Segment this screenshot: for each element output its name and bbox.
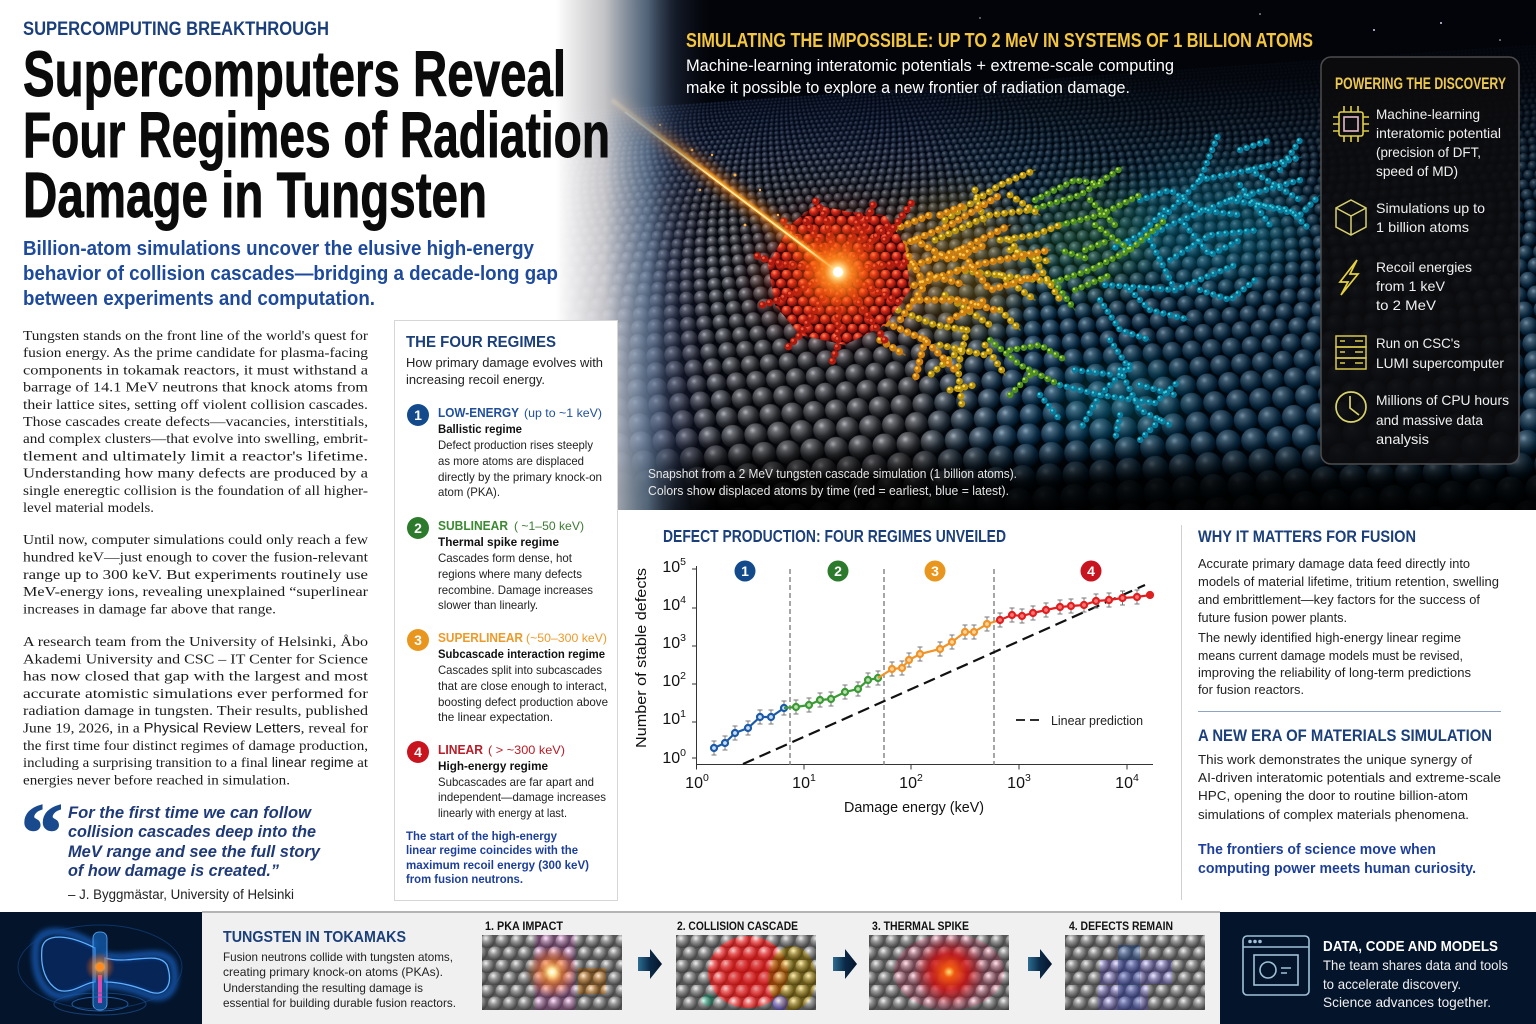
panel: the four regimes [394,320,618,900]
text: new era: simulations of complex materials phenomena. [1198,807,1469,822]
photo: atomic lattice with collision cascade [575,0,1536,510]
y axis label: Number of stable defects [634,568,650,748]
heading: new era: A NEW ERA OF MATERIALS SIMULATION [1198,726,1492,745]
regime 4: High-energy regime [438,759,548,773]
article paragraph 1: components in tokamak reactors, it must withstand a [23,363,369,378]
article paragraph 1: their lattice sites, setting off violent collision cascades. [23,398,368,413]
cascade: red earliest atoms [754,197,915,362]
article paragraph 3: radiation damage in tungsten. Their results, published [23,704,368,719]
regime 3: Subcascade interaction regime [438,647,605,661]
quote [21,787,321,902]
subtitle: behavior of collision cascades—bridging a decade-long gap [23,262,558,285]
article paragraph 1: fusion energy. As the prime candidate for plasma-facing [23,346,368,361]
y axis tick labels: 2 [680,670,686,682]
y axis tick labels: 5 [680,556,686,568]
regime 2: ( ~1–50 keV) [514,519,584,533]
title: Damage in Tungsten [23,159,487,231]
regime 2: Cascades form dense, hot [438,551,573,565]
regime 2: 2 [414,520,422,536]
panel: powering the discovery [1321,57,1519,464]
series: regime 4 points [997,592,1153,623]
stars [979,13,1501,41]
icon: browser window [1243,936,1309,995]
text: data, code and models: Science advances together. [1323,994,1491,1010]
item: machine-learning potential: speed of MD) [1376,163,1458,179]
x axis tick labels: 10 [899,775,917,792]
item: recoil energies: from 1 keV [1376,278,1446,294]
regime badges: 3 [931,563,939,579]
item: billion atoms [1376,200,1485,235]
heading: the four regimes: THE FOUR REGIMES [406,334,556,351]
regime badges: 4 [1087,563,1095,579]
beam: primary knock-on atom track [612,100,874,308]
icon: chip [1333,106,1369,142]
heading: tungsten in tokamaks: TUNGSTEN IN TOKAMAKS [223,929,406,946]
article paragraph 1: tlement and ultimately limit a reactor's lifetime. [23,449,368,464]
article paragraph 2: range up to 300 keV. But experiments routinely use [23,568,368,583]
x axis tick labels: 2 [917,772,923,784]
icon: lightning [1340,260,1358,295]
regime 4: LINEAR [438,743,483,757]
x axis tick labels: 1 [810,772,816,784]
title [23,38,610,231]
article paragraph 3: accurate atomistic simulations ever performed for [23,687,368,702]
text: tungsten in tokamaks: essential for building durable fusion reactors. [223,996,456,1010]
subtitle [23,237,558,310]
article paragraph 1 [23,329,369,516]
regime 3: (~50–300 keV) [526,631,607,645]
legend: Linear prediction [1051,713,1143,728]
icon: clock [1336,392,1366,422]
step 3: thermal spike: 3. THERMAL SPIKE [872,919,969,933]
text: data, code and models [1323,957,1508,1010]
text: new era: This work demonstrates the unique synergy of [1198,752,1472,767]
regime 2: recombine. Damage increases [438,583,593,597]
quote: For the first time we can follow [68,803,313,822]
regime 3: boosting defect production above [438,695,608,709]
text: why it matters: means current damage models must be revised, [1198,648,1463,663]
x axis tick labels: 0 [703,772,709,784]
x axis tick labels: 10 [1115,775,1133,792]
regime 3: Cascades split into subcascades [438,663,602,677]
y axis tick labels: 1 [680,708,686,720]
regime 1 [407,404,602,499]
regime 1: atom (PKA). [438,485,500,499]
note: fusion neutron maximum: The start of the high-energy [406,831,558,843]
step 3: thermal spike [869,919,1009,1010]
regime 2: slower than linearly. [438,598,538,612]
article paragraph 1: Those cascades create defects—vacancies, interstitials, [23,415,368,430]
x axis label: Damage energy (keV) [844,799,984,816]
regime 4: Subcascades are far apart and [438,775,594,789]
photo intro text: make it possible to explore a new frontier of radiation damage. [686,78,1130,97]
heading: data, code and models: DATA, CODE AND MODELS [1323,938,1498,955]
text: why it matters: models of material lifetime, tritium retention, swelling [1198,574,1499,589]
intro text: increasing recoil energy. [406,373,545,387]
step 1: PKA impact [482,919,622,1010]
kicker: SUPERCOMPUTING BREAKTHROUGH [23,19,329,40]
regime 4: ( > ~300 keV) [488,743,565,757]
text: why it matters: future fusion power plants. [1198,610,1347,625]
item: cpu hours [1376,392,1509,447]
y axis tick labels: 10 [662,673,680,690]
item: lumi supercomputer [1376,335,1504,371]
text: why it matters: The newly identified high-energy linear regime [1198,630,1461,645]
icon: cube [1336,200,1366,235]
photo fade into white page [555,0,710,510]
item: recoil energies: to 2 MeV [1376,297,1437,313]
divider: right column [1180,525,1182,900]
article paragraph 3: has now closed that gap with the largest and most [23,670,368,685]
photo intro text: Machine-learning interatomic potentials + extreme-scale computing [686,56,1174,75]
title: Supercomputers Reveal [23,38,566,110]
y axis tick labels: 4 [680,594,686,606]
title: Four Regimes of Radiation [23,99,610,171]
regime 1: LOW-ENERGY [438,406,520,420]
y axis tick labels: 10 [662,750,680,767]
subtitle: Billion-atom simulations uncover the elusive high-energy [23,237,535,260]
item: lumi supercomputer: Run on CSC's [1376,335,1460,351]
y axis tick labels: 10 [662,597,680,614]
article paragraph 2: Until now, computer simulations could only reach a few [23,533,369,548]
text: tungsten in tokamaks: Understanding the resulting damage is [223,981,423,995]
regime 2: regions where many defects [438,567,582,581]
article paragraph 1: level material models. [23,501,154,516]
regime 3: SUPERLINEAR [438,631,523,645]
note: fusion neutron maximum: linear regime coincides with the [406,845,578,857]
article paragraph 1: single eneregtic collision is the foundation of all higher- [23,484,368,499]
regime 2 [407,517,593,612]
article paragraph 2: hundred keV—just enough to cover the fusion-relevant [23,550,368,565]
quote: of how damage is created.” [68,861,279,880]
regime badges [734,560,1102,582]
item: cpu hours: analysis [1376,431,1429,447]
item: billion atoms: Simulations up to [1376,200,1485,216]
series: regime 3 points [878,620,1000,678]
item: recoil energies [1376,259,1472,313]
intro text [406,356,603,387]
text: new era [1198,752,1501,822]
x axis tick labels: 10 [792,775,810,792]
step 1: PKA impact: 1. PKA IMPACT [485,919,564,933]
cascade: green atoms [989,166,1165,395]
error bars [712,590,1140,755]
regime 1: Defect production rises steeply [438,438,593,452]
icon: server rack [1336,336,1366,369]
regime 1: as more atoms are displaced [438,454,584,468]
item: lumi supercomputer: LUMI supercomputer [1376,355,1504,371]
article paragraph 3: energies never before reached in simulation. [23,773,290,788]
arrow: step 3 to 4 [1028,949,1052,979]
article paragraph 3 [23,634,368,788]
y axis tick labels: 10 [662,635,680,652]
icon: quotation mark: “ [21,787,63,880]
photo caption: Snapshot from a 2 MeV tungsten cascade simulation (1 billion atoms). [648,467,1017,481]
text: tungsten in tokamaks [223,950,456,1010]
article paragraph 1: Tungsten stands on the front line of the world's quest for [23,329,368,344]
article paragraph 2 [23,533,369,618]
arrow: step 1 to 2 [638,949,662,979]
subtitle: between experiments and computation. [23,287,375,310]
item: cpu hours: and massive data [1376,412,1483,428]
article paragraph 2: MeV-energy ions, revealing unexplained “superlinear [23,585,368,600]
text: data, code and models: The team shares data and tools [1323,957,1508,973]
text: why it matters: Accurate primary damage data feed directly into [1198,556,1470,571]
regime 2: Thermal spike regime [438,535,559,549]
article paragraph 3: including a surprising transition to a final linear regime at [23,755,368,771]
regime 1: (up to ~1 keV) [524,406,602,420]
axes [692,566,1153,770]
band: bottom strip background [202,911,1220,1024]
text: new era: HPC, opening the door to routine billion-atom [1198,788,1468,803]
article paragraph 3: A research team from the University of Helsinki, Åbo [23,634,368,650]
regime 1: Ballistic regime [438,422,522,436]
article paragraph 3: the first time four distinct regimes of damage production, [23,739,368,754]
regime 4: linearly with energy at last. [438,806,567,820]
y axis tick labels: 3 [680,632,686,644]
series: regime 1 points [711,705,787,751]
text: data, code and models: to accelerate discovery. [1323,976,1461,992]
cascade: orange atoms [879,194,1050,380]
item: machine-learning potential [1376,106,1501,179]
regime 4: independent—damage increases [438,790,606,804]
chart: defect production vs damage energy [634,556,1153,816]
photo caption: Colors show displaced atoms by time (red = earliest, blue = latest). [648,484,1009,498]
x axis tick labels: 10 [685,775,703,792]
intro text: How primary damage evolves with [406,356,603,370]
closing statement: The frontiers of science move when [1198,842,1436,858]
x axis tick labels: 10 [1007,775,1025,792]
item: machine-learning potential: (precision of DFT, [1376,144,1481,160]
closing statement [1198,842,1476,877]
heading: why it matters: WHY IT MATTERS FOR FUSION [1198,527,1416,546]
item: billion atoms: 1 billion atoms [1376,219,1469,235]
y axis tick labels: 0 [680,747,686,759]
y axis tick labels [662,556,686,767]
text: why it matters: improving the reliability of long-term predictions [1198,665,1471,680]
note: fusion neutron maximum [406,831,589,886]
item: machine-learning potential: interatomic potential [1376,125,1501,141]
quote: – J. Byggmästar, University of Helsinki [68,887,294,902]
panel: tokamak illustration [0,912,202,1024]
step 4: defects remain: 4. DEFECTS REMAIN [1069,919,1173,933]
y axis tick labels: 10 [662,559,680,576]
article paragraph 1: Understanding how many defects are produced by a [23,467,369,482]
text: new era: AI-driven interatomic potentials and extreme-scale [1198,770,1501,785]
article paragraph 1: and complex clusters—that evolve into swelling, embrit- [23,432,368,447]
regime 3 [407,629,608,724]
regime 3: the linear expectation. [438,710,553,724]
regime 1: directly by the primary knock-on [438,470,602,484]
quote: collision cascades deep into the [68,822,316,841]
text: why it matters: and embrittlement—key factors for the success of [1198,592,1480,607]
cascade glow [766,170,1300,430]
text: why it matters: for fusion reactors. [1198,682,1304,697]
regime 4 [407,741,606,820]
regime 1: 1 [414,407,422,423]
article paragraph 3: June 19, 2026, in a Physical Review Letters , reveal for [23,720,368,736]
regime badges: 2 [834,563,842,579]
y axis tick labels: 10 [662,711,680,728]
regime 2: SUBLINEAR [438,519,508,533]
x axis tick labels [685,772,1139,792]
arrow: step 2 to 3 [833,949,857,979]
regime 3: 3 [414,632,422,648]
chart heading: DEFECT PRODUCTION: FOUR REGIMES UNVEILED [663,526,1006,546]
photo heading: SIMULATING THE IMPOSSIBLE: UP TO 2 MeV IN SYSTEMS OF 1 BILLION ATOMS [686,30,1313,52]
text: tungsten in tokamaks: creating primary knock-on atoms (PKAs). [223,965,443,979]
closing statement: computing power meets human curiosity. [1198,861,1476,877]
cascade: blue latest atoms [1039,132,1320,440]
regime badges: 1 [741,563,749,579]
note: fusion neutron maximum: from fusion neutrons. [406,874,523,886]
article paragraph 2: increases in damage far above that range. [23,603,276,618]
item: recoil energies: Recoil energies [1376,259,1472,275]
text: why it matters [1198,556,1499,697]
regime 3: that are close enough to interact, [438,679,607,693]
article paragraph 3: Akademi University and CSC – IT Center for Science [23,652,368,667]
item: machine-learning potential: Machine-learning [1376,106,1480,122]
x axis tick labels: 3 [1025,772,1031,784]
note: fusion neutron maximum: maximum recoil energy (300 keV) [406,860,589,872]
step 2: collision cascade [676,919,816,1011]
regime 4: 4 [414,744,422,760]
article paragraph 1: barrage of 14.1 MeV neutrons that knock atoms from [23,381,368,396]
photo caption [648,467,1017,498]
step 2: collision cascade: 2. COLLISION CASCADE [677,919,798,933]
series: regime 2 points [784,675,881,710]
panel: data, code and models [1220,912,1536,1024]
item: cpu hours: Millions of CPU hours [1376,392,1509,408]
quote: MeV range and see the full story [68,842,321,861]
cascade: yellow atoms [897,169,1060,407]
photo intro text [686,56,1174,97]
step 4: defects remain [1065,919,1205,1010]
regime boundaries [790,569,994,765]
x axis tick labels: 4 [1133,772,1139,784]
text: tungsten in tokamaks: Fusion neutrons collide with tungsten atoms, [223,950,453,964]
linear prediction line [743,585,1145,764]
